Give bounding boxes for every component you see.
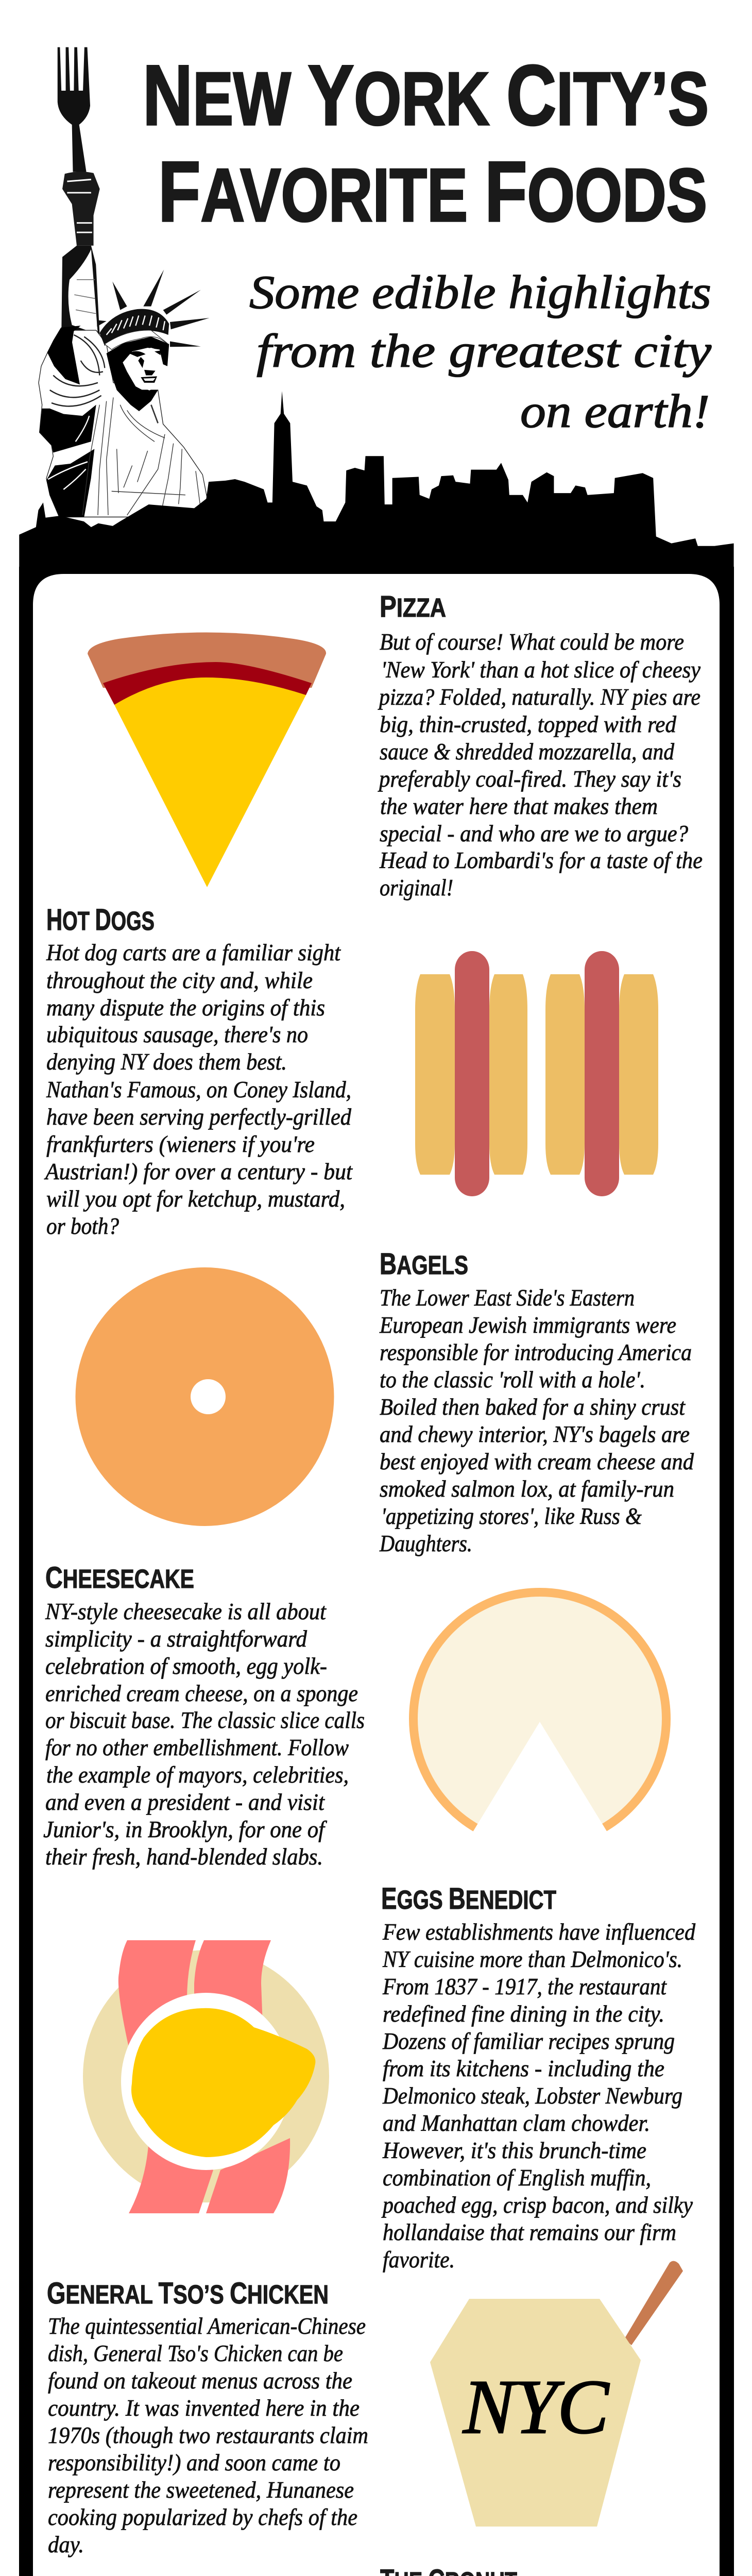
- text: cheesecake description: for no other embellishment. Follow: [45, 1735, 349, 1760]
- robe fold lines: [82, 397, 200, 515]
- icon: two hot dogs: [415, 951, 658, 1196]
- text: bagels description: European Jewish immigrants were: [379, 1312, 676, 1338]
- section: cheesecake: [43, 1561, 666, 1870]
- text: cheesecake description: NY-style cheesecake is all about: [45, 1599, 327, 1624]
- text: pizza description: Head to Lombardi's for a taste of the: [379, 848, 703, 873]
- text: bagels description: Boiled then baked for a shiny crust: [380, 1394, 686, 1420]
- text: bagels description: to the classic 'roll with a hole'.: [380, 1367, 645, 1393]
- robed figure: [39, 269, 210, 517]
- text: cheesecake description: [43, 1599, 365, 1870]
- section: pizza: [88, 590, 703, 901]
- text: pizza description: the water here that makes them: [380, 793, 658, 819]
- text: eggs benedict description: From 1837 - 1917, the restaurant: [382, 1974, 667, 1999]
- egg yolk: [131, 2008, 315, 2157]
- text: pizza description: pizza? Folded, naturally. NY pies are: [378, 684, 700, 710]
- text: pizza description: original!: [380, 875, 453, 901]
- neck shadow and hair: [107, 337, 169, 411]
- text: eggs benedict description: Delmonico steak, Lobster Newburg: [382, 2083, 682, 2109]
- text: hot dogs description: many dispute the origins of this: [46, 995, 325, 1021]
- text: pizza description: [378, 629, 703, 901]
- chopstick: [624, 2261, 683, 2345]
- text: general tso's description: [48, 2313, 368, 2557]
- white content panel: [33, 574, 720, 2576]
- text: pizza description: sauce & shredded mozzarella, and: [380, 739, 674, 765]
- carton: [430, 2299, 641, 2527]
- text: bagels description: smoked salmon lox, at family-run: [380, 1476, 674, 1502]
- text: bagels description: Daughters.: [379, 1531, 472, 1556]
- text: general tso's description: 1970s (though two restaurants claim: [48, 2422, 368, 2448]
- text: eggs benedict description: combination of English muffin,: [383, 2165, 651, 2191]
- heading: cheesecake: CHEESECAKE: [45, 1561, 194, 1595]
- arm shadow: [47, 326, 81, 384]
- section: eggs benedict: [83, 1882, 695, 2273]
- text: general tso's description: cooking popularized by chefs of the: [48, 2504, 357, 2530]
- subtitle: [249, 266, 711, 437]
- section: hot dogs: [44, 903, 658, 1239]
- text: general tso's description: country. It was invented here in the: [48, 2395, 360, 2421]
- lower dark drapery: [40, 405, 96, 453]
- text: cheesecake description: Junior's, in Brooklyn, for one of: [43, 1817, 327, 1842]
- black frame: [19, 567, 734, 2576]
- text: general tso's description: found on takeout menus across the: [48, 2368, 352, 2394]
- text: eggs benedict description: redefined fine dining in the city.: [383, 2001, 664, 2027]
- sleeve folds: [50, 335, 105, 406]
- heading: eggs benedict: EGGS BENEDICT: [381, 1882, 556, 1916]
- text: cheesecake description: and even a president - and visit: [45, 1789, 325, 1815]
- text: eggs benedict description: and Manhattan clam chowder.: [383, 2110, 650, 2136]
- icon: statue of liberty holding a fork: [39, 47, 210, 517]
- heading: general tso's chicken: GENERAL TSO’S CHICKEN: [47, 2277, 329, 2310]
- text: bagels description: and chewy interior, NY's bagels are: [380, 1421, 690, 1447]
- icon: pizza slice: [88, 633, 326, 887]
- text: eggs benedict description: Dozens of familiar recipes sprung: [382, 2028, 675, 2054]
- text: pizza description: special - and who are we to argue?: [380, 821, 688, 846]
- text: cheesecake description: celebration of smooth, egg yolk-: [45, 1653, 327, 1679]
- diadem strip: [105, 330, 168, 350]
- text: general tso's description: day.: [48, 2532, 84, 2557]
- title: [143, 48, 709, 240]
- text: hot dogs description: throughout the city and, while: [46, 968, 313, 993]
- icon: cheesecake with missing slice: [413, 1592, 666, 1855]
- text: eggs benedict description: NY cuisine more than Delmonico's.: [382, 1946, 682, 1972]
- english muffin: [83, 1950, 329, 2202]
- text: pizza description: big, thin-crusted, topped with red: [380, 711, 676, 737]
- facial features: [129, 350, 161, 383]
- title: NEW YORK CITY’S: [143, 48, 709, 143]
- text: general tso's description: dish, General Tso's Chicken can be: [48, 2341, 343, 2366]
- text: hot dogs description: Austrian!) for over a century - but: [44, 1159, 353, 1184]
- text: eggs benedict description: However, it's this brunch-time: [382, 2138, 646, 2163]
- subtitle: on earth!: [520, 385, 710, 437]
- text: pizza description: But of course! What could be more: [380, 629, 684, 655]
- text: hot dogs description: Hot dog carts are a familiar sight: [46, 940, 341, 965]
- subtitle: from the greatest city: [257, 325, 711, 377]
- text: eggs benedict description: poached egg, crisp bacon, and silky: [381, 2192, 693, 2218]
- text: general tso's description: represent the sweetened, Hunanese: [48, 2477, 354, 2503]
- icon: takeout box: [430, 2261, 683, 2527]
- crown band: [99, 309, 169, 346]
- header: [19, 47, 734, 578]
- text: bagels description: 'appetizing stores', like Russ &: [381, 1503, 642, 1529]
- egg white: [121, 1993, 291, 2170]
- text: general tso's description: responsibility!) and soon came to: [48, 2450, 340, 2476]
- text: bagels description: best enjoyed with cream cheese and: [380, 1449, 694, 1475]
- robe: [39, 330, 208, 517]
- icon: eggs benedict: [83, 1940, 329, 2213]
- text: hot dogs description: or both?: [46, 1213, 119, 1239]
- crown spikes: [97, 269, 210, 347]
- text: hot dogs description: have been serving perfectly-grilled: [46, 1104, 351, 1130]
- text: pizza description: preferably coal-fired. They say it's: [378, 766, 681, 792]
- text: hot dogs description: will you opt for ketchup, mustard,: [46, 1186, 345, 1212]
- text: cheesecake description: their fresh, hand-blended slabs.: [45, 1844, 323, 1870]
- text: general tso's description: The quintessential American-Chinese: [48, 2313, 366, 2339]
- heading: pizza: PIZZA: [380, 590, 446, 623]
- text: eggs benedict description: Few establishments have influenced: [382, 1919, 695, 1945]
- text: hot dogs description: Nathan's Famous, on Coney Island,: [46, 1077, 351, 1103]
- text: bagels description: [379, 1285, 694, 1556]
- text: cheesecake description: the example of mayors, celebrities,: [46, 1762, 349, 1788]
- text: bagels description: responsible for introducing America: [380, 1340, 692, 1365]
- text: hot dogs description: [44, 940, 353, 1239]
- fork and raised arm: [58, 47, 100, 336]
- text: eggs benedict description: from its kitchens - including the: [383, 2056, 664, 2081]
- section: general tso's chicken: [47, 2261, 683, 2557]
- section: bagels: [75, 1247, 694, 1556]
- text: cheesecake description: enriched cream cheese, on a sponge: [45, 1681, 358, 1706]
- face: [124, 348, 161, 391]
- bacon strips: [118, 1940, 196, 2047]
- text: eggs benedict description: hollandaise that remains our firm: [383, 2219, 676, 2245]
- title: FAVORITE FOODS: [158, 144, 707, 240]
- heading: bagels: BAGELS: [380, 1247, 468, 1281]
- skyline silhouette: [19, 391, 734, 578]
- text: cheesecake description: simplicity - a straightforward: [45, 1626, 307, 1652]
- text: hot dogs description: denying NY does them best.: [46, 1049, 287, 1075]
- text: eggs benedict description: [381, 1919, 695, 2273]
- carton lettering: NYC: [462, 2364, 610, 2450]
- text: hot dogs description: ubiquitous sausage, there's no: [46, 1022, 308, 1047]
- text: pizza description: 'New York' than a hot slice of cheesy: [381, 657, 700, 683]
- text: hot dogs description: frankfurters (wieners if you're: [46, 1131, 315, 1157]
- heading: hot dogs: HOT DOGS: [46, 903, 155, 937]
- subtitle: Some edible highlights: [249, 266, 711, 318]
- icon: bagel: [75, 1267, 334, 1526]
- text: eggs benedict description: favorite.: [383, 2247, 455, 2273]
- text: bagels description: The Lower East Side's Eastern: [380, 1285, 635, 1311]
- text: cheesecake description: or biscuit base. The classic slice calls: [45, 1707, 365, 1733]
